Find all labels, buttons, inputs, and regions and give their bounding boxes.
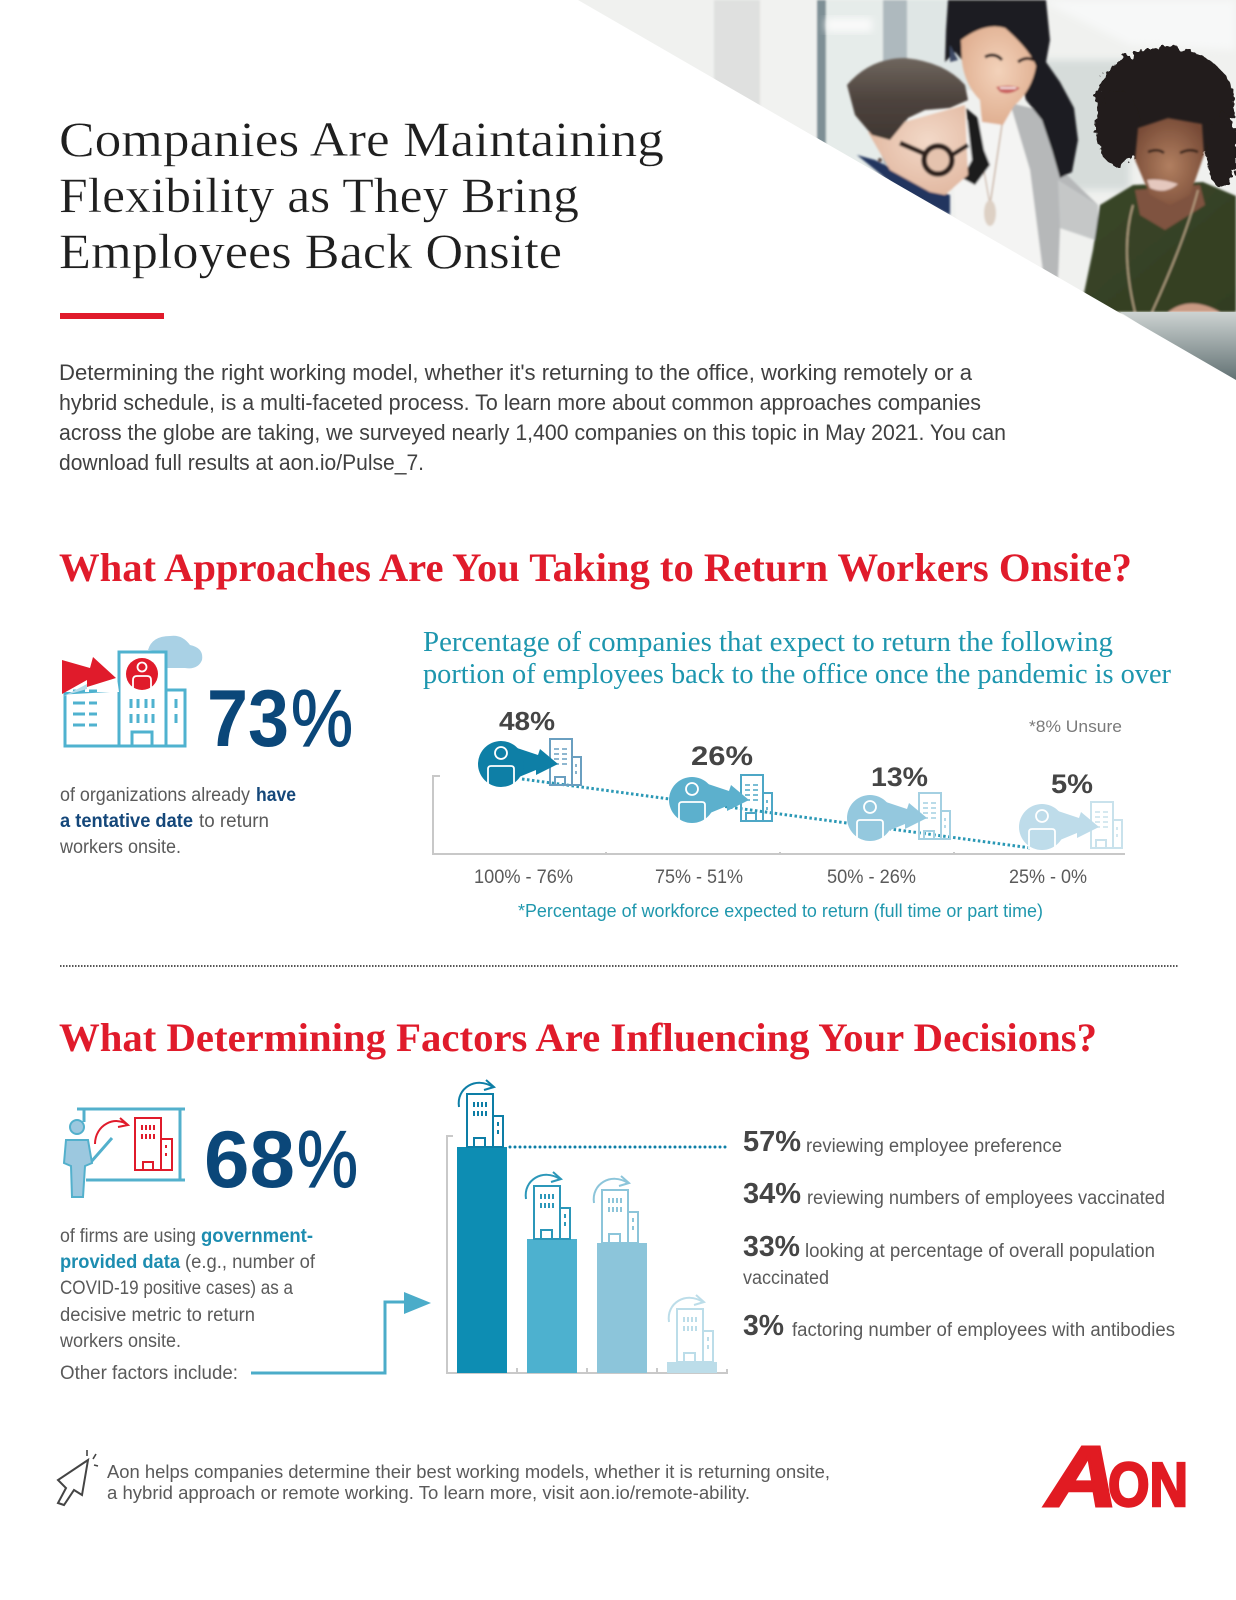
intro paragraph: hybrid schedule, is a multi-faceted process. To learn more about common approaches companies — [59, 390, 981, 415]
text: tentative date — [59, 785, 296, 858]
item: 25%-0% — [1009, 769, 1122, 888]
text: government-provided data: provided data — [60, 1252, 180, 1273]
icon: office building with red arrow — [62, 636, 202, 746]
stat: 68%: 68 — [204, 1115, 295, 1205]
logo: Aon: A — [1044, 1429, 1118, 1525]
text: government-provided data: decisive metric to return — [60, 1305, 255, 1326]
intro paragraph: Determining the right working model, whether it's returning to the office, working remotely or a — [59, 360, 973, 385]
chart subheading — [423, 627, 1172, 690]
item: 33% — [743, 1231, 1155, 1289]
title: Employees Back Onsite — [59, 223, 562, 279]
item: 33%: vaccinated — [743, 1268, 829, 1289]
chart subheading: Percentage of companies that expect to return the following — [423, 627, 1113, 658]
intro paragraph — [59, 360, 1006, 475]
text: government-provided data: of firms are using — [60, 1226, 196, 1247]
text: tentative date: of organizations already — [60, 785, 250, 806]
photo: three colleagues looking at a laptop — [570, 0, 1236, 385]
icon: presenter with board — [64, 1109, 185, 1197]
chart: expected return of employees — [433, 706, 1125, 921]
title accent rule — [60, 313, 164, 319]
bar: 57% — [457, 1080, 507, 1373]
text: tentative date: have — [256, 785, 296, 806]
item: 57%: 57% — [743, 1126, 801, 1158]
logo: Aon — [1044, 1429, 1188, 1525]
right woman green top — [1080, 182, 1236, 312]
item: 34%: reviewing numbers of employees vaccinated — [807, 1188, 1165, 1209]
title: Flexibility as They Bring — [59, 167, 579, 223]
laptop — [1120, 312, 1236, 385]
item: 33%: looking at percentage of overall population — [805, 1241, 1155, 1262]
logo: Aon: ON — [1108, 1451, 1188, 1520]
stat: 73% — [207, 674, 353, 764]
item: 75%-51%: 26% — [691, 741, 753, 771]
chart subheading: portion of employees back to the office once the pandemic is over — [423, 659, 1172, 690]
cardigan and blouse of middle woman — [847, 0, 1236, 312]
item: 25%-0%: 5% — [1051, 769, 1093, 799]
text: tentative date: to return — [199, 811, 269, 832]
intro paragraph: across the globe are taking, we surveyed nearly 1,400 companies on this topic in May 2021. You can — [59, 420, 1006, 445]
item: 3%: factoring number of employees with antibodies — [792, 1320, 1175, 1341]
item: 75%-51% — [655, 741, 772, 888]
note: unsure: *8% Unsure — [1029, 717, 1122, 736]
face of right woman — [1135, 118, 1204, 205]
text: government-provided data: government- — [201, 1226, 313, 1247]
item: 100%-76%: 48% — [499, 706, 555, 736]
item: 3%: 3% — [743, 1310, 784, 1342]
footer text: a hybrid approach or remote working. To learn more, visit aon.io/remote-ability. — [107, 1483, 750, 1503]
hair of middle woman — [945, 0, 1078, 178]
item: 75%-51%: 75% - 51% — [655, 867, 743, 888]
text: government-provided data — [59, 1226, 316, 1384]
footer text — [107, 1462, 830, 1503]
item: 3% — [743, 1310, 1175, 1342]
item: 33%: 33% — [743, 1231, 800, 1263]
stat: 68% — [204, 1115, 358, 1205]
bar chart: determining factors — [447, 1080, 730, 1373]
bar: 33% — [594, 1176, 647, 1373]
face of middle woman — [961, 26, 1036, 125]
list: other factors — [743, 1126, 1175, 1342]
text: tentative date: workers onsite. — [59, 837, 181, 858]
intro paragraph: download full results at aon.io/Pulse_7. — [59, 450, 424, 475]
icon: cursor — [58, 1450, 98, 1505]
text: government-provided data: (e.g., number of — [185, 1252, 316, 1273]
stat: 68%: % — [297, 1115, 358, 1205]
item: 57%: reviewing employee preference — [806, 1136, 1062, 1157]
title: Companies Are Maintaining — [59, 111, 664, 167]
bar: 3% — [667, 1295, 717, 1373]
item: 57% — [743, 1126, 1062, 1158]
heading: approaches: What Approaches Are You Taking to Return Workers Onsite? — [59, 545, 1132, 590]
item: 100%-76% — [474, 706, 581, 888]
text: government-provided data: workers onsite. — [59, 1331, 181, 1352]
item: 34% — [743, 1178, 1165, 1210]
stat: 73%: 73 — [207, 674, 289, 764]
heading: determining factors: What Determining Factors Are Influencing Your Decisions? — [59, 1015, 1097, 1060]
title — [59, 111, 664, 279]
text: government-provided data: COVID-19 positive cases) as a — [60, 1278, 293, 1299]
arrow: other factors to chart — [251, 1292, 431, 1373]
text: government-provided data: Other factors include: — [60, 1363, 238, 1384]
stat: 73%: % — [291, 674, 353, 764]
item: 34%: 34% — [743, 1178, 801, 1210]
left woman — [857, 155, 950, 215]
bar: 34% — [526, 1172, 577, 1373]
footer text: Aon helps companies determine their best working models, whether it is returning onsite, — [107, 1462, 830, 1482]
text: tentative date: a tentative date — [60, 811, 193, 832]
item: 50%-26% — [827, 762, 950, 888]
chart footnote: *Percentage of workforce expected to return (full time or part time) — [518, 901, 1043, 921]
item: 50%-26%: 13% — [871, 762, 928, 792]
item: 100%-76%: 100% - 76% — [474, 867, 573, 888]
item: 50%-26%: 50% - 26% — [827, 867, 916, 888]
afro hair — [1095, 47, 1236, 188]
item: 25%-0%: 25% - 0% — [1009, 867, 1087, 888]
